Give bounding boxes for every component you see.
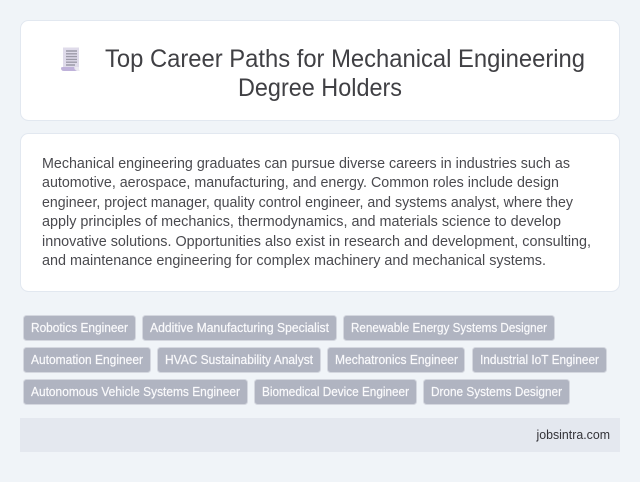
tag: Additive Manufacturing Specialist: Additive Manufacturing Specialist: [150, 321, 330, 335]
tag: Autonomous Vehicle Systems Engineer: [24, 380, 248, 404]
icon: paper scroll: [61, 48, 80, 71]
footer: site name: jobsintra.com: [536, 427, 610, 442]
tag: Renewable Energy Systems Designer: Renewable Energy Systems Designer: [351, 321, 547, 335]
tag: Biomedical Device Engineer: [254, 380, 416, 404]
tag: Mechatronics Engineer: Mechatronics Engineer: [335, 353, 458, 367]
title: Degree Holders: [238, 74, 402, 102]
text block: description: and maintenance engineering for complex machinery and mechanical systems.: [42, 253, 546, 269]
text block: description: engineer, project manager, quality control engineer, and systems analyst, where they: [42, 195, 574, 211]
tag: Biomedical Device Engineer: Biomedical Device Engineer: [262, 385, 409, 399]
text block: description: automotive, aerospace, manufacturing, and energy. Common roles include design: [42, 175, 559, 191]
tag: HVAC Sustainability Analyst: [158, 348, 320, 372]
title: [105, 45, 585, 102]
title: Top Career Paths for Mechanical Engineering: [105, 45, 585, 73]
text block: description: Mechanical engineering graduates can pursue diverse careers in industries such as: [42, 156, 570, 172]
tag: Drone Systems Designer: Drone Systems Designer: [431, 385, 562, 399]
panel: title card: [20, 20, 620, 120]
tag: Drone Systems Designer: [424, 380, 570, 404]
tags: career paths: [24, 316, 606, 404]
tag: Mechatronics Engineer: [328, 348, 464, 372]
tag: Automation Engineer: Automation Engineer: [31, 353, 143, 367]
tag: Additive Manufacturing Specialist: [142, 316, 336, 340]
tag: Robotics Engineer: Robotics Engineer: [31, 321, 128, 335]
footer bar: [20, 418, 620, 452]
tag: Autonomous Vehicle Systems Engineer: Autonomous Vehicle Systems Engineer: [31, 385, 240, 399]
tag: Automation Engineer: [24, 348, 150, 372]
tag: HVAC Sustainability Analyst: HVAC Sustainability Analyst: [165, 353, 314, 367]
text block: description: innovative solutions. Opportunities also exist in research and development, consulting,: [42, 234, 591, 250]
tag: Renewable Energy Systems Designer: [344, 316, 554, 340]
text block: description: apply principles of mechanics, thermodynamics, and materials science to develop: [42, 214, 561, 230]
tag: Industrial IoT Engineer: Industrial IoT Engineer: [480, 353, 599, 367]
text block: description: [42, 156, 591, 269]
panel: description card: [20, 134, 620, 292]
tag: Industrial IoT Engineer: [472, 348, 606, 372]
tag: Robotics Engineer: [24, 316, 136, 340]
